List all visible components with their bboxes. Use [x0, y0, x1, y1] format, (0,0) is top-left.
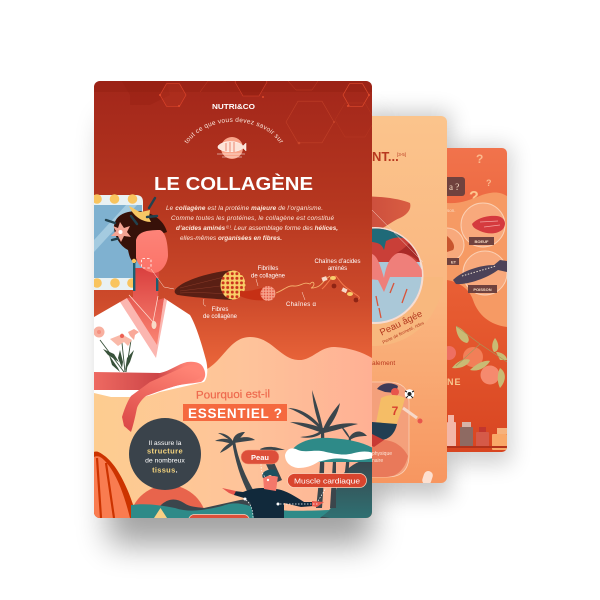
- island with wave: [285, 438, 373, 468]
- curved subtitle: tout ce que vous devez savoir sur: [184, 117, 284, 144]
- tag: cropped bottom pill: [188, 514, 250, 528]
- callout circle: structure: de nombreux: [145, 458, 185, 464]
- poultry circle: ET: [451, 260, 457, 264]
- intro text: son.: [447, 208, 456, 213]
- callout circle: structure: [129, 418, 201, 490]
- label: amino chains: aminés: [328, 266, 347, 272]
- tag: muscle cardiaque: Muscle cardiaque: [294, 476, 360, 486]
- heading tag: a ?: [449, 182, 459, 192]
- beef circle: [461, 203, 505, 247]
- callout circle: structure: Il assure la: [149, 440, 182, 447]
- question marks: ?: [469, 189, 479, 206]
- supplement bottles: [447, 415, 507, 450]
- tag: peau: [241, 450, 279, 464]
- back card: nutrition sources: [447, 148, 507, 452]
- palm trees: [215, 390, 367, 508]
- surfboard: [90, 452, 137, 518]
- footballer capsule: 7: [392, 404, 399, 418]
- card background: [94, 81, 372, 518]
- label: fibres: de collagène: [203, 314, 238, 320]
- intro paragraph: elles-mêmes organisées en fibres.: [180, 235, 282, 242]
- hair: [114, 211, 167, 263]
- necklace: [129, 295, 158, 322]
- heading: essentiel: ESSENTIEL ?: [188, 406, 282, 421]
- magnified skin circle: [372, 210, 424, 324]
- fibril: [240, 287, 268, 300]
- label: fibrilles: de collagène: [251, 274, 286, 280]
- card drop shadows: [108, 112, 511, 545]
- label: chains alpha: Chaînes α: [286, 302, 317, 308]
- hexagon network: [94, 81, 372, 144]
- question marks: [470, 154, 491, 199]
- caption: aged skin: Perte de fermeté, rides: [382, 320, 426, 345]
- alpha chains: [276, 276, 330, 293]
- callout circle: structure: tissus.: [152, 466, 178, 474]
- caption: aged skin: Peau âgée: [378, 308, 424, 338]
- cropped heading: NE: [447, 377, 462, 387]
- lips shape: [372, 196, 410, 228]
- peach halo: [372, 334, 412, 346]
- footballer capsule: naire: [372, 458, 383, 464]
- blouse: [94, 300, 207, 397]
- earrings: [132, 259, 158, 291]
- fibre bundle: [175, 270, 232, 300]
- icon: soccer ball: [405, 389, 414, 399]
- poultry circle: [447, 228, 464, 265]
- fish circle: [453, 251, 507, 295]
- front card: le collagène: [94, 81, 372, 518]
- icon: fish on circle: [217, 137, 246, 159]
- heading fragment: NT...: [372, 149, 399, 164]
- middle card: skin and ageing: [372, 116, 447, 483]
- foreground dunes: [131, 500, 330, 518]
- intro paragraph: d’acides aminés⁽¹⁾. Leur assemblage forme des hélices,: [176, 225, 338, 232]
- fibre diagram: [151, 259, 361, 320]
- intro paragraph: Le collagène est la protéine majeure de l’organisme.: [166, 205, 323, 212]
- label: fibres: Fibres: [212, 307, 228, 313]
- collar: [120, 298, 167, 358]
- brand logo: NUTRI&CO: [212, 104, 256, 111]
- figure with anatomy labels: [222, 464, 326, 518]
- dark coastal slope: [318, 458, 372, 518]
- fibre cross-section: [220, 270, 246, 300]
- intro paragraph: Comme toutes les protéines, le collagène est constitué: [171, 215, 334, 222]
- fish circle: POISSON: [473, 287, 492, 292]
- embroidered flowers: [94, 326, 139, 372]
- label: fibres: [203, 307, 238, 320]
- intro paragraph: [166, 205, 338, 242]
- section text fragment: alement: [372, 360, 395, 367]
- leader lines: [151, 269, 305, 306]
- footballer capsule: physique: [372, 451, 392, 457]
- heading: pourquoi: Pourquoi est-il: [196, 388, 270, 402]
- heading fragment: [3-5]: [397, 152, 406, 157]
- tag: peau: Peau: [251, 453, 269, 462]
- tag: muscle cardiaque: [288, 474, 366, 488]
- question marks: ?: [476, 152, 483, 166]
- label: fibrilles: Fibrilles: [258, 266, 278, 272]
- neck and chest: [127, 268, 164, 345]
- heading tag: [447, 177, 465, 196]
- label: amino chains: Chaînes d’acides: [314, 259, 361, 265]
- footballer capsule: [372, 382, 422, 478]
- arm: [94, 362, 205, 390]
- illustration: woman: [94, 198, 207, 432]
- pale capsule: [422, 471, 433, 483]
- beef circle: BOEUF: [474, 239, 489, 244]
- heading fragment: [372, 152, 406, 161]
- face: [136, 230, 168, 273]
- hair flowers and leaves: [106, 198, 157, 242]
- peach branch: [442, 326, 507, 388]
- skin patch: [142, 258, 151, 268]
- illustration: mirror with bulbs: [94, 194, 143, 290]
- label: fibrilles: [251, 266, 286, 280]
- question marks: ?: [486, 178, 492, 188]
- sun: [129, 485, 207, 563]
- peach blob: [447, 192, 507, 327]
- amino acid chain: [322, 276, 359, 300]
- title: LE COLLAGÈNE: [154, 173, 313, 194]
- callout circle: structure: structure: [147, 446, 183, 456]
- label: amino chains: [314, 259, 361, 272]
- peach hills: [94, 337, 372, 518]
- forearm and hand: [122, 365, 204, 432]
